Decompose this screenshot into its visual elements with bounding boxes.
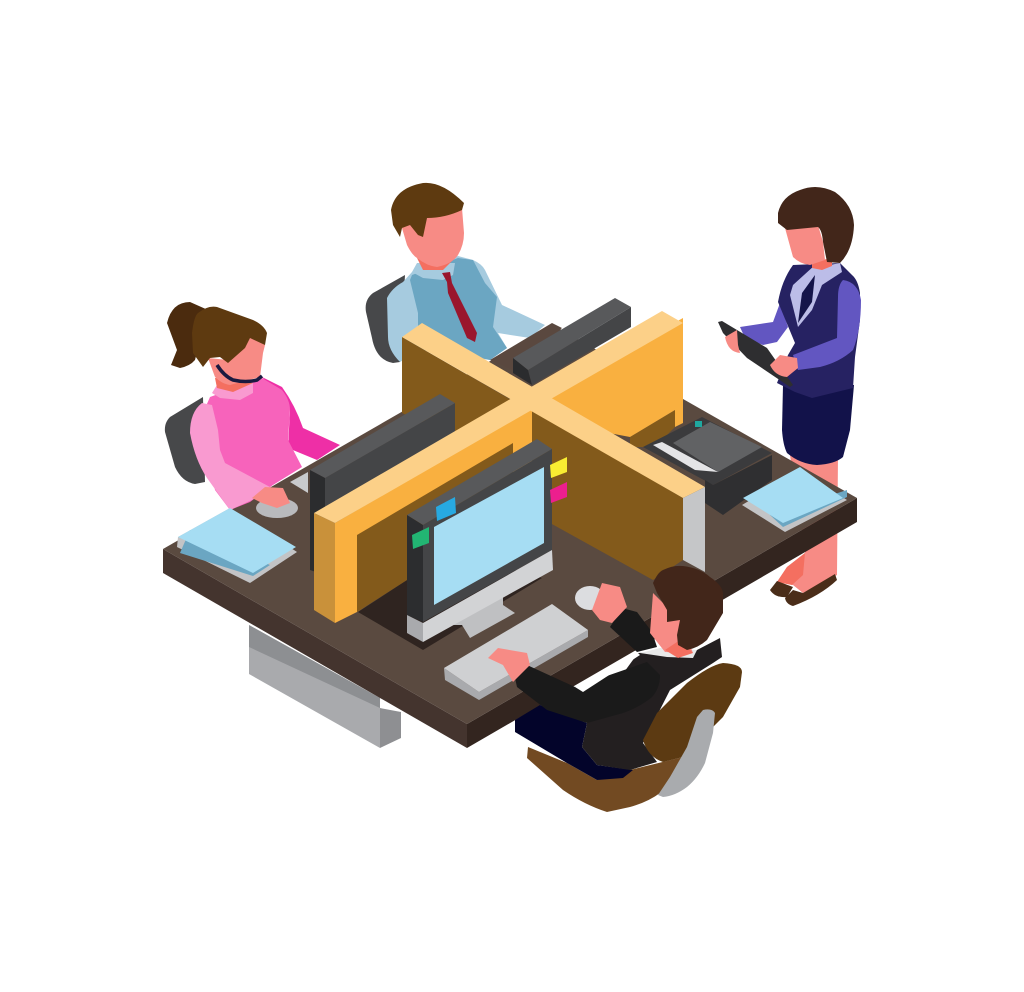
skirt xyxy=(782,385,854,465)
man at front xyxy=(488,566,742,812)
far sleeve xyxy=(740,303,788,345)
face xyxy=(402,208,464,267)
monitor front xyxy=(423,449,552,622)
jacket xyxy=(777,263,860,398)
shirt strip xyxy=(575,652,640,692)
printer xyxy=(643,417,772,515)
front monitor xyxy=(407,439,567,642)
desk xyxy=(163,325,857,748)
neck xyxy=(665,640,693,658)
neck ring xyxy=(212,383,253,400)
sticky note: pink xyxy=(550,482,567,503)
scarf xyxy=(790,263,842,327)
hands xyxy=(725,330,740,353)
neck xyxy=(215,378,253,392)
left hand xyxy=(488,648,530,682)
sweater body xyxy=(200,378,302,510)
mouse xyxy=(575,586,605,610)
chair seat xyxy=(527,747,683,812)
monitor chin xyxy=(423,550,553,642)
shirt sleeves xyxy=(387,256,545,362)
legs xyxy=(777,455,838,593)
sticky note: green xyxy=(412,527,429,549)
left folder xyxy=(177,508,297,583)
cubicle front panels xyxy=(314,408,705,623)
screen xyxy=(434,467,544,605)
chair spine xyxy=(658,709,715,797)
collar xyxy=(412,263,455,280)
chair xyxy=(165,397,205,484)
collar xyxy=(640,648,697,658)
woman with headset xyxy=(165,302,340,518)
cubicle top rails xyxy=(314,311,705,523)
face xyxy=(785,225,825,265)
near arm xyxy=(515,662,660,723)
near sleeve xyxy=(793,280,861,370)
head skin xyxy=(650,593,693,653)
standing woman xyxy=(718,187,861,606)
neck xyxy=(812,258,832,270)
headset xyxy=(217,365,262,382)
small keyboard xyxy=(290,472,308,493)
right folder xyxy=(742,467,847,532)
tablet xyxy=(718,321,793,387)
face xyxy=(208,335,265,385)
hair xyxy=(391,183,464,237)
chair back xyxy=(643,663,742,762)
printer button xyxy=(695,421,702,427)
stand xyxy=(453,597,515,638)
desk pedestal xyxy=(249,625,401,748)
shoes xyxy=(770,581,793,597)
back monitor xyxy=(490,298,631,385)
near sleeve xyxy=(190,403,270,510)
mouse xyxy=(256,498,298,518)
vest xyxy=(410,258,507,360)
far arm xyxy=(262,377,340,460)
chair xyxy=(366,275,405,363)
monitor shadow xyxy=(358,570,542,650)
sticky note: blue xyxy=(436,497,456,521)
man at back xyxy=(366,183,545,363)
hand xyxy=(252,487,290,508)
hair xyxy=(653,566,723,650)
ponytail xyxy=(167,302,208,368)
sticky note: yellow xyxy=(550,457,567,478)
trousers xyxy=(515,705,633,780)
keyboard xyxy=(444,604,588,700)
neck xyxy=(417,255,458,270)
right hand xyxy=(592,583,627,623)
hair xyxy=(778,187,854,263)
cubicle rear panels xyxy=(402,318,683,447)
monitor top xyxy=(407,439,552,525)
tie xyxy=(442,272,477,342)
monitor side xyxy=(407,515,423,622)
far arm xyxy=(610,608,657,652)
left monitor xyxy=(310,394,455,575)
torso xyxy=(582,638,722,770)
hair xyxy=(192,307,267,367)
